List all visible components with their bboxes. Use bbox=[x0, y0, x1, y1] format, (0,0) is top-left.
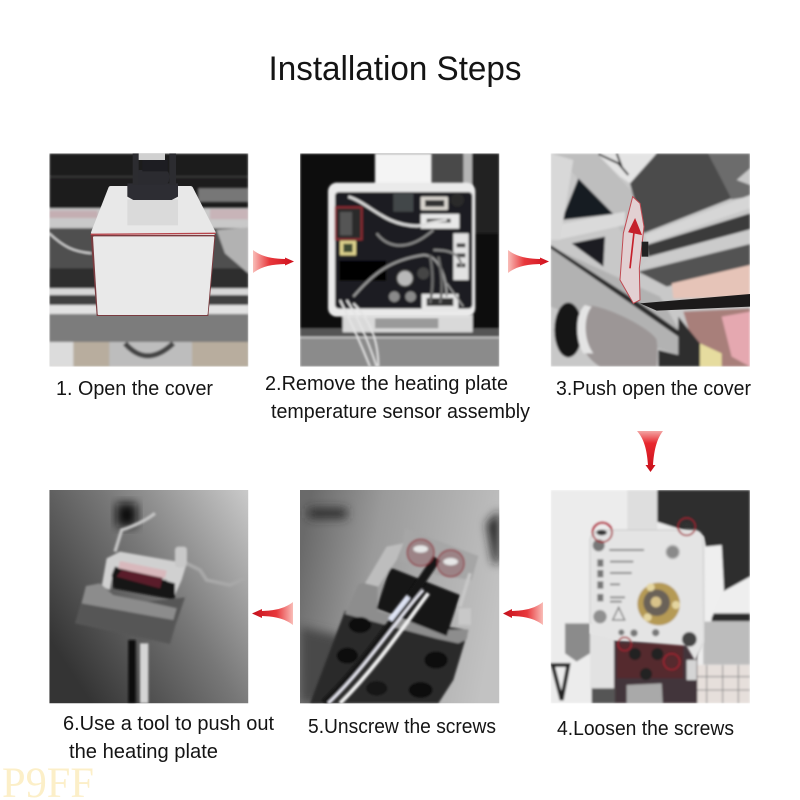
white sensor wires bbox=[340, 300, 378, 367]
red push arrow bbox=[629, 220, 641, 268]
panel: step 6 photo, push out the heating plate bbox=[49, 490, 248, 703]
wires and screws bbox=[325, 539, 464, 703]
sensor housing bbox=[328, 153, 475, 367]
arrow: step 2 to step 3 bbox=[508, 250, 549, 273]
arrow: step 5 to step 6 bbox=[252, 602, 293, 625]
extruder plate bbox=[590, 518, 704, 670]
step 2 caption bbox=[265, 373, 530, 423]
tweezers bbox=[640, 294, 750, 311]
foam block bbox=[310, 528, 478, 703]
QR sticker bbox=[340, 241, 356, 255]
panel: step 5 photo, unscrew the screws bbox=[300, 490, 499, 703]
brass gear bbox=[637, 583, 680, 625]
step 6 caption bbox=[63, 713, 274, 763]
title: Installation Steps bbox=[268, 50, 522, 88]
arrow: step 4 to step 5 bbox=[503, 602, 543, 625]
arrow: step 1 to step 2 bbox=[253, 250, 294, 273]
step 6 caption: the heating plate bbox=[69, 741, 218, 763]
label text marks on plate bbox=[609, 550, 644, 602]
step 1 caption: 1. Open the cover bbox=[56, 378, 213, 400]
heating element and bracket bbox=[75, 513, 245, 703]
step 2 caption: 2.Remove the heating plate bbox=[265, 373, 508, 395]
step 2 caption: temperature sensor assembly bbox=[271, 401, 530, 423]
pink highlighted cover bbox=[620, 197, 648, 303]
red screw circles bbox=[593, 518, 695, 670]
step 5 caption: 5.Unscrew the screws bbox=[308, 716, 496, 738]
step 6 caption: 6.Use a tool to push out bbox=[63, 713, 274, 735]
panel: step 1 photo, open the cover bbox=[49, 153, 248, 367]
panel: step 4 photo, loosen the screws bbox=[551, 490, 750, 703]
panel: step 2 photo, heating plate sensor assembly bbox=[300, 153, 499, 367]
cover box bbox=[91, 153, 216, 316]
panel: step 3 photo, push open the cover bbox=[551, 153, 750, 367]
arrow: step 3 to step 4 bbox=[637, 431, 663, 472]
step 3 caption: 3.Push open the cover bbox=[556, 378, 751, 400]
red highlight box bbox=[336, 207, 362, 239]
step 4 caption: 4.Loosen the screws bbox=[557, 718, 734, 740]
